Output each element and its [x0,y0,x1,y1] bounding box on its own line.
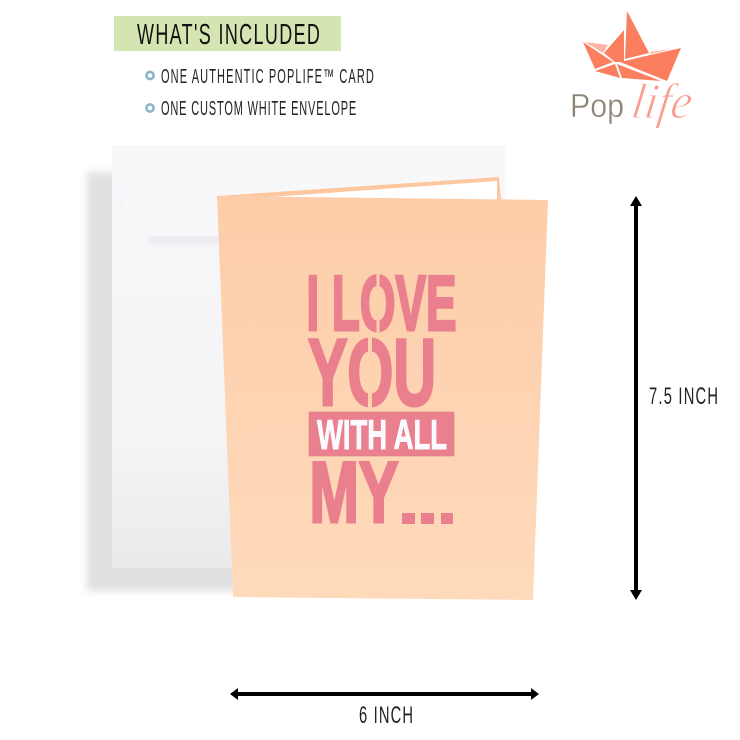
message box: with all [309,411,454,458]
logo word: pop: Pop [570,87,624,124]
icon: origami boat [583,11,681,81]
card inside [270,181,497,200]
message box: with all: WITH ALL [317,411,447,458]
heading: what's included: WHAT'S INCLUDED [137,19,320,51]
card front [217,196,548,600]
list of included items [146,66,374,120]
logo: poplife [570,11,696,129]
card message [306,259,456,541]
bullet item: card: ONE AUTHENTIC POPLIFE™ CARD [161,66,374,88]
flap shadow [150,236,225,243]
label: 6 inch: 6 INCH [359,702,413,729]
message line: you: YOU [308,320,436,426]
card back panel [217,177,501,200]
label: 7.5 inch: 7.5 INCH [649,383,718,410]
envelope shadow [87,172,237,591]
logo word: life: life [628,73,696,129]
arrow: width dimension [230,688,539,700]
message line: my: MY [310,445,398,541]
greeting card [217,177,548,600]
message line: you [308,320,436,426]
envelope [87,145,505,591]
bullet item: envelope: ONE CUSTOM WHITE ENVELOPE [161,98,356,120]
message line: i love: I LOVE [306,259,456,347]
envelope body [112,145,505,568]
message line: i love [306,259,456,347]
arrow: height dimension [630,196,642,600]
envelope flap [112,145,505,236]
